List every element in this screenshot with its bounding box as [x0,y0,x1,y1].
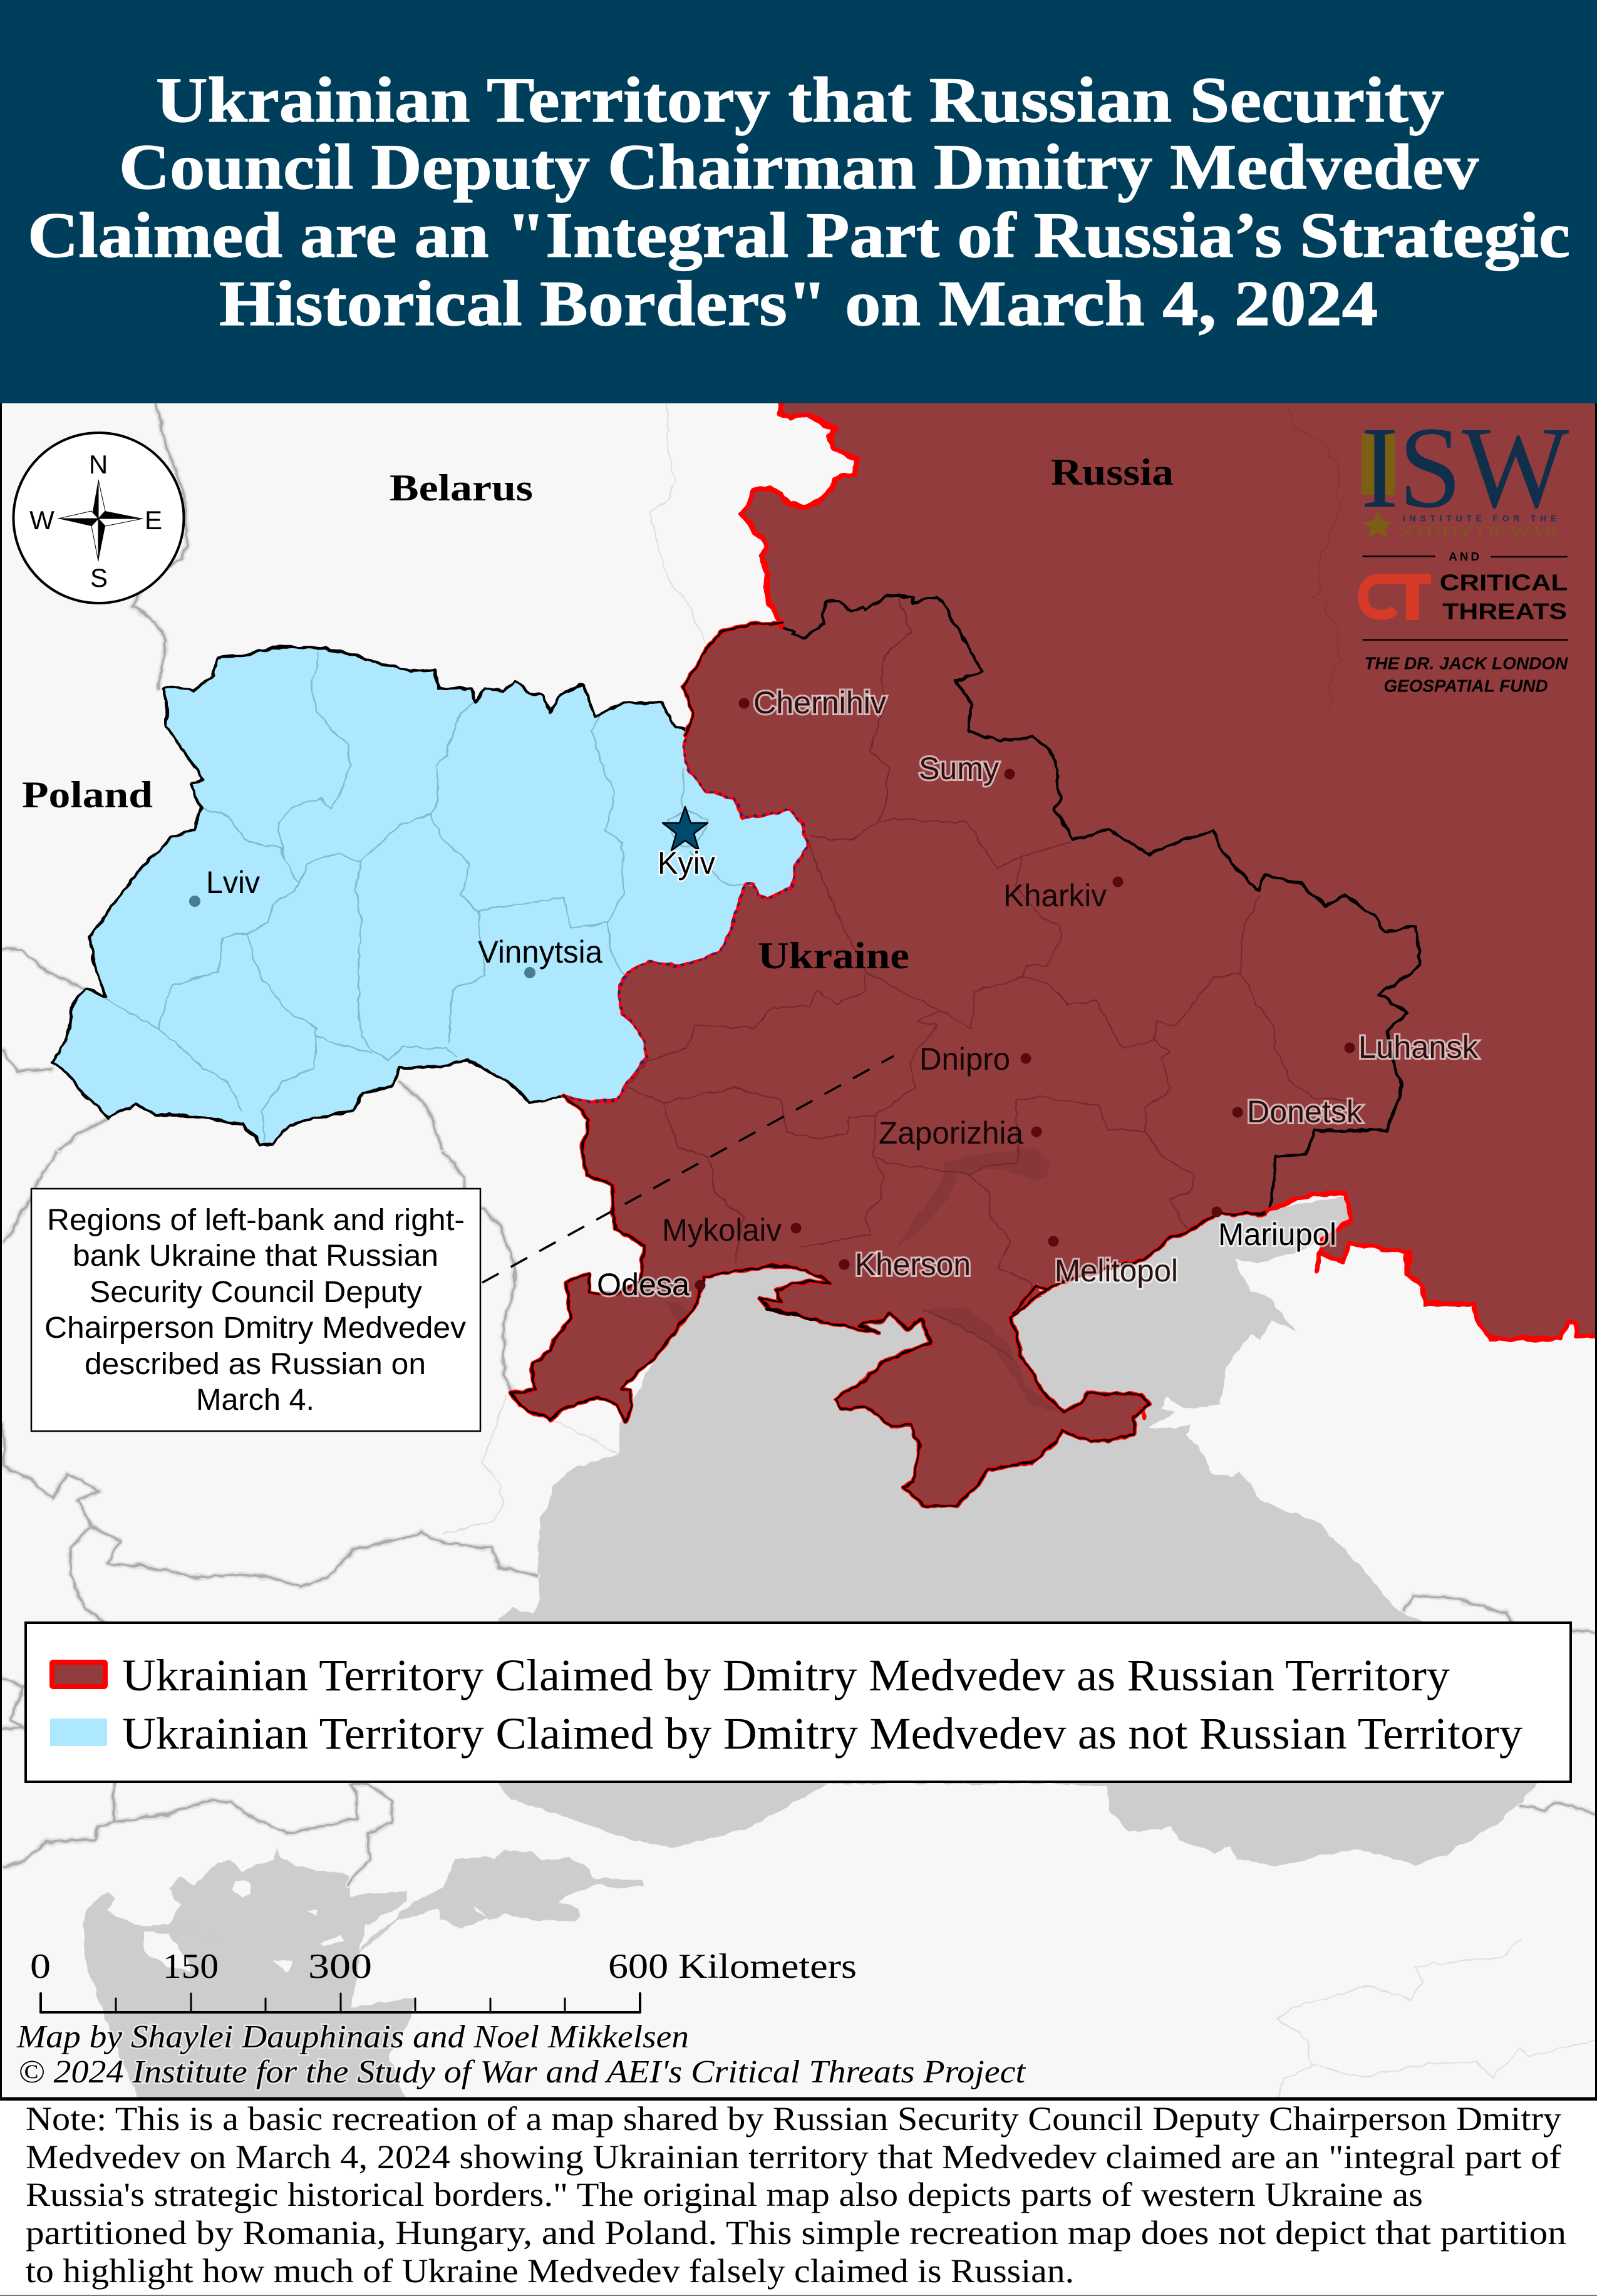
legend [26,1623,1571,1782]
logo: ISW, Critical Threats, Jack London Geospatial Fund [1361,403,1569,695]
scale bar: 150 [163,1947,219,1986]
panel: title header [0,0,1597,403]
scale bar: 300 [308,1947,372,1986]
compass rose: N [89,450,108,479]
city labels: Donetsk [1247,1094,1363,1129]
panel: note: Medvedev on March 4, 2024 showing Ukrainian territory that Medvedev claimed are an "integral part of [26,2138,1561,2176]
logo: ISW, Critical Threats, Jack London Geospatial Fund: GEOSPATIAL FUND [1383,676,1548,695]
panel: note: to highlight how much of Ukraine Medvedev falsely claimed is Russian. [26,2252,1074,2290]
city labels: Melitopol [1055,1253,1178,1288]
sea: Aegean and Marmara [84,1849,644,2105]
city labels: Luhansk [1358,1030,1479,1065]
country labels: Poland [22,774,153,815]
credits [16,2019,1026,2090]
compass rose: W [29,505,54,535]
city labels: Zaporizhia [879,1115,1023,1151]
territory: western Ukraine (light blue) [52,646,807,1144]
city labels: Kharkiv [1003,878,1107,913]
callout: regions description [31,1189,480,1431]
panel: note: Russia's strategic historical borders." The original map also depicts parts of western Ukraine as [26,2176,1423,2213]
city labels: Chernihiv [753,685,886,720]
country labels: Belarus [390,467,533,509]
icon: Kyiv capital star [663,807,708,851]
panel: title header: Historical Borders" on March 4, 2024 [219,268,1378,339]
callout: regions description: bank Ukraine that Russian [73,1239,438,1273]
logo: ISW, Critical Threats, Jack London Geospatial Fund: CRITICAL [1440,570,1568,596]
compass rose: S [90,563,108,592]
dashed leader line from callout [482,1056,894,1283]
border: north and south frontier of Ukraine [52,595,1421,1211]
logo: ISW, Critical Threats, Jack London Geospatial Fund: THE DR. JACK LONDON [1364,653,1568,673]
faint Russian oblast lines [1289,405,1341,708]
panel: note: Note: This is a basic recreation of a map shared by Russian Security Council Deputy Chairperson Dmitry [26,2100,1561,2138]
country labels [22,452,1174,976]
territory: Russia and claimed eastern Ukraine fill [512,388,1597,1506]
country labels: Ukraine [758,935,909,976]
legend swatch: claimed as Russian [52,1662,105,1687]
panel: title header: Claimed are an "Integral Part of Russia’s Strategic [28,200,1570,271]
city labels: Odesa [597,1267,690,1302]
city labels: Kherson [855,1247,971,1282]
city labels: Dnipro [919,1042,1010,1077]
callout: regions description: described as Russian on [85,1348,426,1381]
darker overlays: reservoirs and low-lying areas [664,1148,1062,1414]
city labels: Lviv [206,865,260,900]
country labels: Russia [1051,452,1174,493]
logo: ISW, Critical Threats, Jack London Geospatial Fund: STUDY OF WAR [1401,523,1559,542]
city labels: Kyiv [658,845,715,881]
oblast boundaries in eastern Ukraine [626,599,1361,1357]
callout: regions description: Security Council Deputy [90,1276,422,1309]
sea: Black Sea and Sea of Azov [498,1196,1549,1866]
city labels: Mariupol [1218,1217,1336,1252]
panel: note: partitioned by Romania, Hungary, and Poland. This simple recreation map does not depict that partition [26,2214,1566,2252]
panel: map background [0,401,1597,2099]
legend: Ukrainian Territory Claimed by Dmitry Medvedev as not Russian Territory [122,1709,1522,1759]
oblast boundaries in western Ukraine [106,653,753,1144]
map geography: seas, borders, territories [3,388,1597,2105]
compass rose: E [145,505,162,535]
credits: © 2024 Institute for the Study of War and AEI's Critical Threats Project [18,2054,1026,2090]
panel: note [0,2097,1597,2296]
legend: Ukrainian Territory Claimed by Dmitry Medvedev as Russian Territory [122,1650,1450,1700]
border: claimed territory red outline [512,388,1597,1506]
country borders: Poland, Belarus, Slovakia, Hungary, Romania [3,403,1597,2098]
logo: ISW, Critical Threats, Jack London Geospatial Fund: INSTITUTE FOR THE [1403,514,1556,524]
legend swatch: not claimed as Russian [50,1719,107,1746]
callout: regions description: Chairperson Dmitry Medvedev [44,1311,466,1345]
compass rose [14,433,184,603]
callout: regions description: March 4. [196,1383,314,1417]
panel: title header: Ukrainian Territory that Russian Security [156,65,1444,136]
logo: ISW, Critical Threats, Jack London Geospatial Fund: THREATS [1442,598,1567,624]
logo: ISW, Critical Threats, Jack London Geospatial Fund: AND [1449,550,1479,563]
scale bar: 0 [30,1947,51,1986]
callout: regions description: Regions of left-bank and right- [47,1204,465,1237]
panel: title header: Council Deputy Chairman Dmitry Medvedev [119,132,1479,203]
credits: Map by Shaylei Dauphinais and Noel Mikkelsen [16,2019,689,2055]
map frame [1,402,1596,2098]
city markers [189,698,1355,1290]
logo: ISW, Critical Threats, Jack London Geospatial Fund: ISW [1361,403,1569,532]
border: contact line between claimed and unclaimed territory [564,732,807,1102]
city labels: Sumy [919,751,999,786]
city labels: Vinnytsia [478,934,602,970]
scale bar [30,1947,857,2012]
city labels [206,685,1479,1302]
scale bar: 600 Kilometers [608,1947,857,1986]
city labels: Mykolaiv [662,1213,782,1248]
